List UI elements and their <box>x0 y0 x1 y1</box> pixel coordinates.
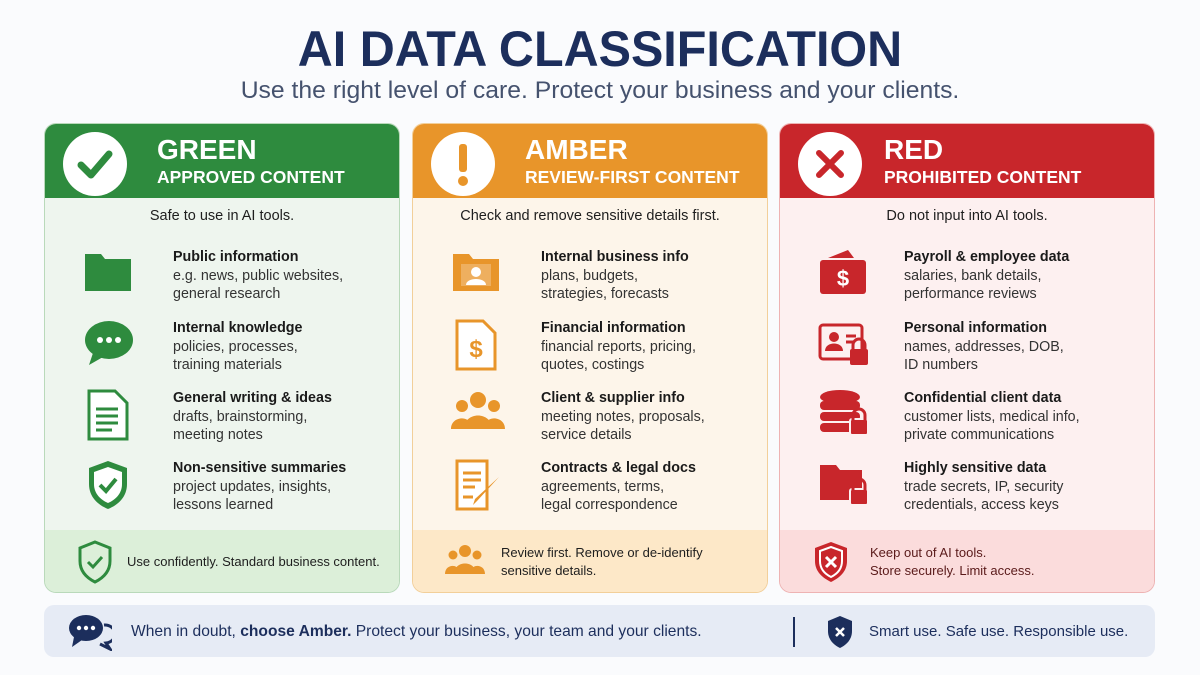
red lead: Do not input into AI tools. <box>886 208 1048 224</box>
amber footer: sensitive details. <box>501 563 596 578</box>
item: client & supplier: Client & supplier info <box>541 390 685 406</box>
amber footer: Review first. Remove or de-identify <box>501 545 703 560</box>
item: client & supplier: service details <box>541 427 632 443</box>
amber footer <box>413 530 767 594</box>
item: confidential client data: customer lists, medical info, <box>904 408 1080 424</box>
green header: APPROVED CONTENT <box>157 167 345 187</box>
item: payroll: salaries, bank details, <box>904 268 1041 284</box>
item: public information <box>85 249 343 302</box>
item: payroll: performance reviews <box>904 286 1037 302</box>
amber lead: Check and remove sensitive details first. <box>460 208 720 224</box>
item: financial information: quotes, costings <box>541 357 644 373</box>
panel: red <box>779 123 1155 593</box>
icon: shield <box>828 616 852 648</box>
panel: amber <box>412 123 768 593</box>
item: financial information <box>456 320 696 373</box>
green footer: Use confidently. Standard business content. <box>127 554 380 569</box>
item: contracts <box>456 460 696 513</box>
item: internal knowledge: training materials <box>173 357 282 373</box>
item: internal knowledge: policies, processes, <box>173 338 298 354</box>
item: payroll <box>820 249 1070 302</box>
amber header: AMBER <box>525 134 628 165</box>
icon: chat bubbles <box>69 615 112 651</box>
item: non-sensitive summaries: project updates, insights, <box>173 478 331 494</box>
banner message: When in doubt, choose Amber. Protect your business, your team and your clients. <box>131 623 702 640</box>
item: highly sensitive <box>820 460 1064 513</box>
item: non-sensitive summaries <box>89 460 346 513</box>
green header: GREEN <box>157 134 257 165</box>
red footer: Store securely. Limit access. <box>870 563 1034 578</box>
item: internal business info: plans, budgets, <box>541 268 638 284</box>
amber header: REVIEW-FIRST CONTENT <box>525 167 740 187</box>
red header <box>780 124 1154 198</box>
amber header <box>413 124 767 198</box>
subtitle: Use the right level of care. Protect your business and your clients. <box>241 77 959 104</box>
panel: green <box>44 123 400 593</box>
item: financial information: financial reports, pricing, <box>541 338 696 354</box>
item: internal business info: Internal business info <box>541 249 689 265</box>
title: AI DATA CLASSIFICATION <box>298 21 902 77</box>
item: payroll: $ <box>837 266 849 291</box>
item: confidential client data <box>820 390 1080 443</box>
item: highly sensitive: Highly sensitive data <box>904 460 1046 476</box>
item: internal knowledge <box>85 320 302 373</box>
item: internal business info <box>453 249 689 302</box>
item: confidential client data: private communications <box>904 427 1054 443</box>
item: contracts: Contracts & legal docs <box>541 460 696 476</box>
item: highly sensitive: credentials, access keys <box>904 497 1059 513</box>
item: general writing: drafts, brainstorming, <box>173 408 307 424</box>
item: highly sensitive: trade secrets, IP, security <box>904 478 1063 494</box>
red header: PROHIBITED CONTENT <box>884 167 1081 187</box>
item: contracts: legal correspondence <box>541 497 678 513</box>
item: internal knowledge: Internal knowledge <box>173 320 302 336</box>
bottom banner <box>44 605 1155 657</box>
item: client & supplier: meeting notes, proposals, <box>541 408 705 424</box>
item: public information: Public information <box>173 249 298 265</box>
item: contracts: agreements, terms, <box>541 478 664 494</box>
item: personal information: Personal information <box>904 320 1047 336</box>
red footer <box>780 530 1154 594</box>
item: public information: general research <box>173 286 280 302</box>
item: confidential client data: Confidential client data <box>904 390 1061 406</box>
item: non-sensitive summaries: Non-sensitive summaries <box>173 460 346 476</box>
red header: RED <box>884 134 943 165</box>
item: personal information <box>818 320 1064 373</box>
green header <box>45 124 399 198</box>
red footer: Keep out of AI tools. <box>870 545 986 560</box>
green footer <box>45 530 399 594</box>
item: financial information: Financial information <box>541 320 686 336</box>
item: non-sensitive summaries: lessons learned <box>173 497 273 513</box>
green lead: Safe to use in AI tools. <box>150 208 294 224</box>
item: general writing <box>88 390 332 443</box>
item: payroll: Payroll & employee data <box>904 249 1069 265</box>
item: client & supplier <box>451 390 705 443</box>
item: public information: e.g. news, public websites, <box>173 268 343 284</box>
item: financial information: $ <box>469 336 483 363</box>
item: general writing: meeting notes <box>173 427 263 443</box>
tagline: Smart use. Safe use. Responsible use. <box>869 623 1128 640</box>
item: internal business info: strategies, forecasts <box>541 286 669 302</box>
item: general writing: General writing & ideas <box>173 390 332 406</box>
item: personal information: ID numbers <box>904 357 978 373</box>
item: personal information: names, addresses, DOB, <box>904 338 1064 354</box>
